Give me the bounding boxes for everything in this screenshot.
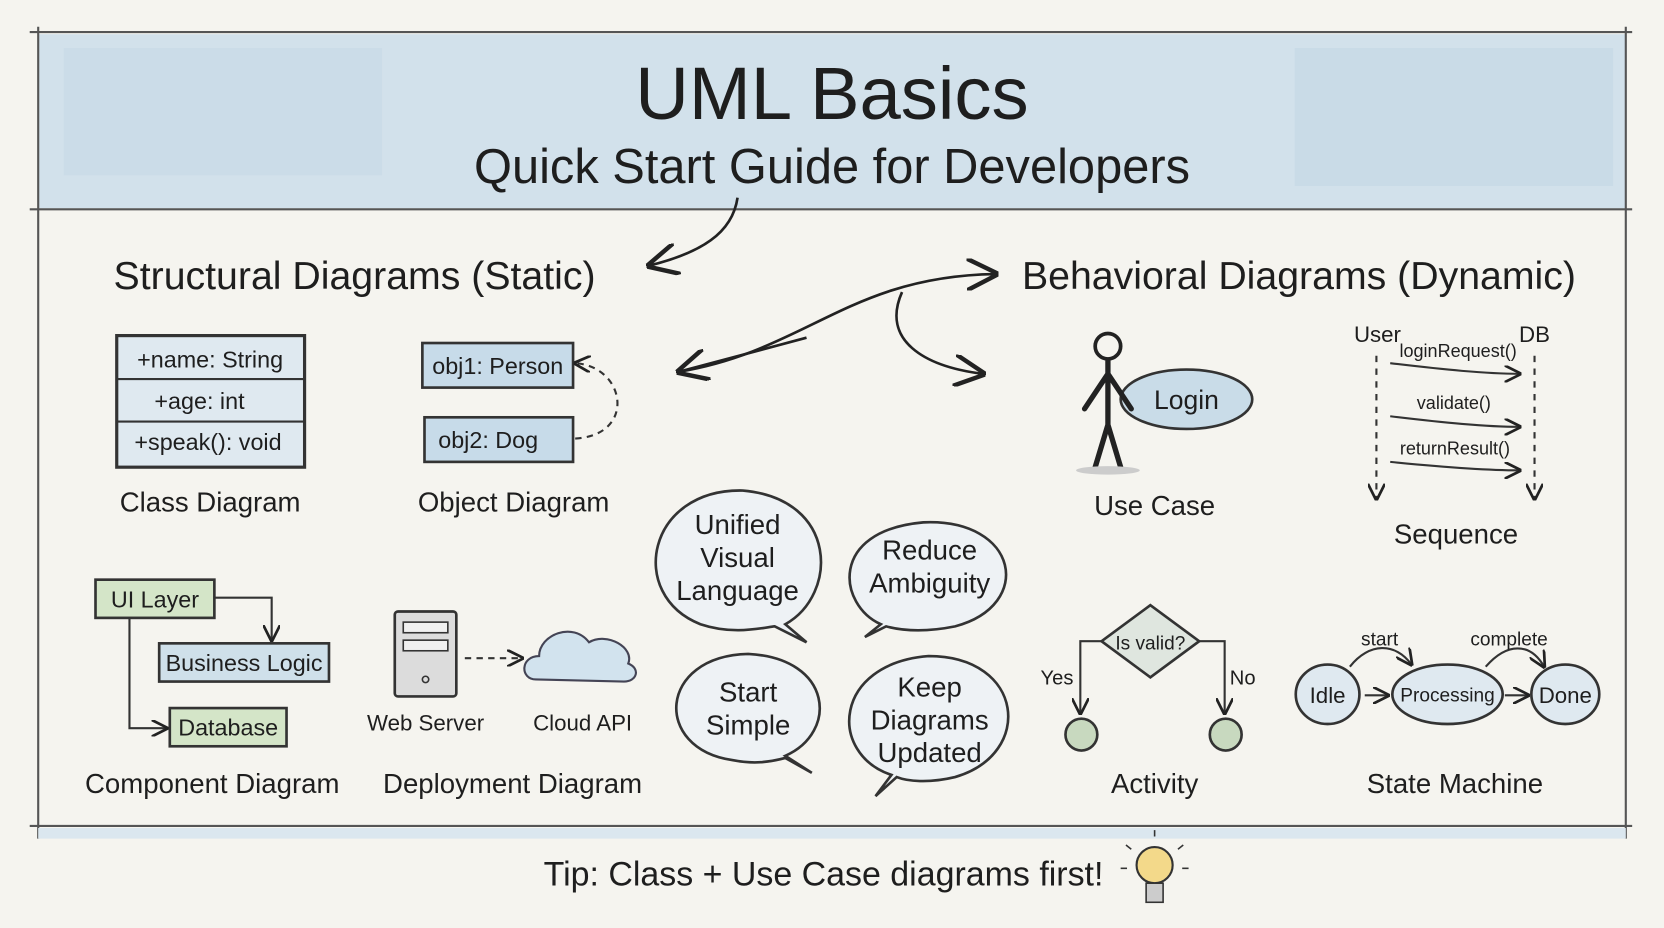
bubble: keep diagrams updated: Updated [877,737,982,768]
bubble: unified visual language: Language [676,575,799,606]
class diagram: +name: String [137,346,283,372]
state machine: State Machine [1367,768,1543,799]
activity: Yes [1041,668,1073,690]
activity: Is valid? [1115,634,1185,655]
bubble: reduce ambiguity: Ambiguity [869,567,990,598]
bubble: start simple: Start [719,677,778,708]
subtitle: Quick Start Guide for Developers [474,140,1190,194]
component diagram: Business Logic [166,650,323,676]
sequence: DB [1519,322,1550,347]
state machine: complete [1470,629,1548,650]
heading: behavioral: Behavioral Diagrams (Dynamic) [1022,254,1576,298]
bubble: start simple [676,654,820,773]
sequence: validate() [1417,393,1491,413]
arrows: double-headed connection [679,274,995,374]
sequence: Sequence [1394,519,1518,550]
deployment diagram: Web Server [367,710,485,735]
object diagram [418,343,617,518]
state machine: Idle [1310,683,1346,708]
deployment diagram: Cloud API [533,710,632,735]
bubble: unified visual language [656,490,821,642]
state machine [1296,629,1599,799]
use case: Use Case [1094,490,1215,521]
use case: Login [1154,385,1219,415]
use case [1076,333,1252,521]
arrow: title to structural [649,198,738,266]
bubble: reduce ambiguity [850,522,1006,637]
bubble: keep diagrams updated [849,656,1008,796]
state machine: Done [1539,683,1592,708]
speech bubbles [656,490,1008,796]
class diagram: +age: int [154,388,245,414]
sequence: User [1354,322,1402,347]
state machine: Processing [1400,686,1495,707]
class diagram: Class Diagram [120,487,301,518]
bubble: keep diagrams updated: Keep [897,671,962,702]
title: UML Basics [635,52,1029,135]
deployment diagram [367,612,642,799]
object diagram: Object Diagram [418,487,609,518]
activity: Activity [1111,768,1198,799]
bubble: reduce ambiguity: Reduce [882,535,977,566]
sequence [1354,322,1550,550]
activity: No [1230,668,1256,690]
component diagram: UI Layer [111,586,199,612]
class diagram [117,336,305,518]
heading: structural: Structural Diagrams (Static) [114,254,596,298]
activity [1041,605,1256,799]
component diagram: Component Diagram [85,768,339,799]
component diagram [85,580,339,799]
deployment diagram: Deployment Diagram [383,768,642,799]
class diagram: +speak(): void [134,429,282,455]
tip: Tip: Class + Use Case diagrams first! [544,855,1103,893]
state machine: start [1361,629,1399,650]
sequence: returnResult() [1400,438,1510,458]
bubble: keep diagrams updated: Diagrams [871,704,989,735]
sequence: loginRequest() [1399,341,1517,361]
icon: lightbulb [1121,830,1189,902]
bubble: unified visual language: Unified [695,509,780,540]
component diagram: Database [178,715,278,741]
bubble: start simple: Simple [706,710,790,741]
object diagram: obj2: Dog [438,427,538,453]
object diagram: obj1: Person [432,353,563,379]
bubble: unified visual language: Visual [700,542,775,573]
